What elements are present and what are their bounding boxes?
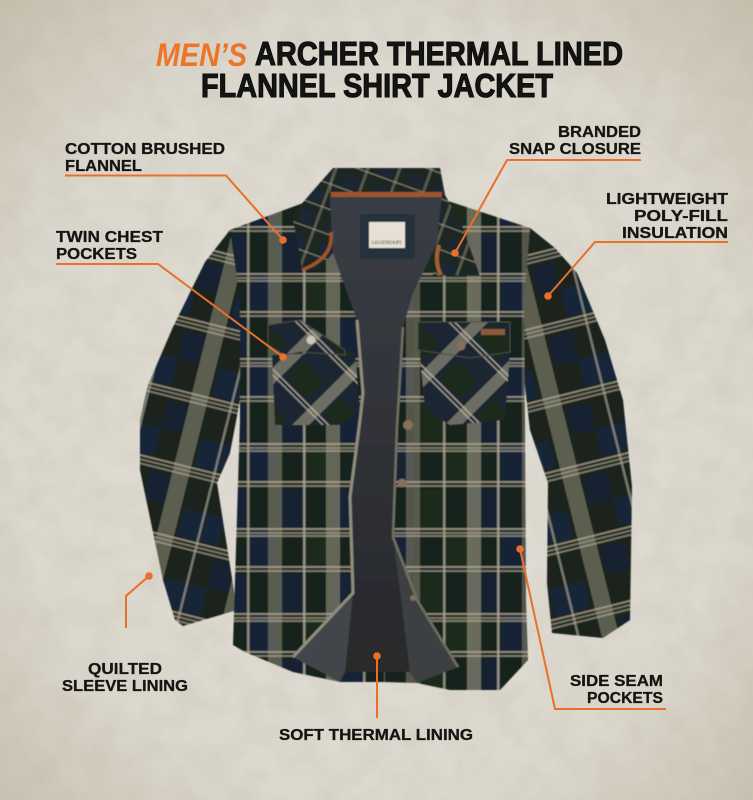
callout: quilted sleeve lining: SLEEVE LINING	[62, 678, 188, 695]
callout: lightweight poly-fill insulation	[544, 191, 728, 300]
callout: twin chest pockets: TWIN CHEST	[56, 229, 163, 246]
neck label: LEGENDARY	[372, 241, 403, 246]
collar right	[433, 168, 480, 276]
jacket right front	[385, 168, 530, 690]
callout: cotton brushed flannel: COTTON BRUSHED	[65, 141, 225, 158]
placket edge highlights	[293, 320, 363, 657]
callout: branded snap closure	[451, 124, 641, 257]
callout: soft thermal lining: SOFT THERMAL LINING	[279, 727, 473, 744]
lining flap right	[393, 537, 458, 683]
callout: quilted sleeve lining	[62, 572, 188, 695]
callout: branded snap closure: SNAP CLOSURE	[509, 141, 641, 158]
callout: soft thermal lining	[279, 652, 473, 744]
title: FLANNEL SHIRT JACKET	[201, 67, 553, 104]
right pocket	[420, 352, 510, 425]
callout: lightweight poly-fill insulation: LIGHTWEIGHT	[606, 191, 728, 208]
callout: side seam pockets: POCKETS	[587, 690, 663, 707]
callout: side seam pockets: SIDE SEAM	[570, 673, 663, 690]
snaps	[306, 336, 466, 601]
callout: twin chest pockets: POCKETS	[56, 246, 137, 263]
pocket logo tag	[481, 329, 505, 335]
collar trim left and right	[302, 232, 331, 270]
callout: twin chest pockets	[56, 229, 287, 361]
callout: branded snap closure: BRANDED	[558, 124, 641, 141]
title	[156, 35, 623, 104]
callout: side seam pockets	[516, 545, 666, 709]
left pocket	[272, 352, 360, 425]
right sleeve	[515, 228, 632, 638]
title: ARCHER THERMAL LINED	[255, 35, 623, 72]
collar stand and leather trim	[330, 168, 443, 196]
callout: cotton brushed flannel	[65, 141, 287, 244]
title accent: MEN'S: MEN’S	[156, 37, 248, 73]
callout: lightweight poly-fill insulation: POLY-FILL	[634, 208, 728, 225]
jacket left front	[230, 168, 385, 682]
right pocket flap	[418, 322, 510, 358]
neck label	[360, 214, 415, 259]
left pocket flap	[268, 320, 345, 355]
jacket illustration	[140, 168, 632, 690]
thermal lining	[293, 193, 458, 683]
callout: cotton brushed flannel: FLANNEL	[65, 158, 142, 175]
callout: quilted sleeve lining: QUILTED	[88, 661, 162, 678]
callout: lightweight poly-fill insulation: INSULATION	[622, 225, 728, 242]
left sleeve	[140, 230, 250, 626]
collar left	[292, 168, 333, 270]
lining flap left	[293, 593, 353, 682]
